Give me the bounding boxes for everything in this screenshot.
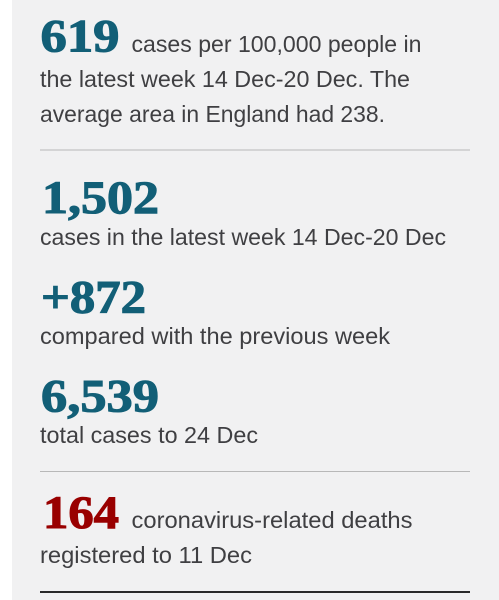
stat: change on previous week: compared with the previous week [40, 323, 390, 349]
stat: total cases: 6,539 [41, 370, 159, 422]
stat: total cases [40, 370, 258, 448]
stat: deaths: registered to 11 Dec [40, 542, 252, 568]
stat: deaths: 164 [43, 487, 119, 539]
stat: deaths [40, 487, 412, 568]
stat: weekly case rate: cases per 100,000 people in [132, 31, 422, 57]
stat: change on previous week [40, 272, 390, 349]
stat: deaths: coronavirus-related deaths [132, 507, 412, 533]
stat: weekly case rate: 619 [40, 10, 120, 62]
stat: weekly cases: 1,502 [42, 172, 159, 224]
stat: weekly case rate: the latest week 14 Dec-20 Dec. The [40, 66, 410, 92]
stat: weekly case rate [40, 10, 422, 127]
stat: total cases: total cases to 24 Dec [40, 422, 258, 448]
stat: change on previous week: +872 [41, 272, 146, 324]
stat: weekly case rate: average area in England had 238. [40, 101, 385, 127]
stat: weekly cases: cases in the latest week 14 Dec-20 Dec [40, 224, 446, 250]
stat: weekly cases [40, 172, 446, 250]
